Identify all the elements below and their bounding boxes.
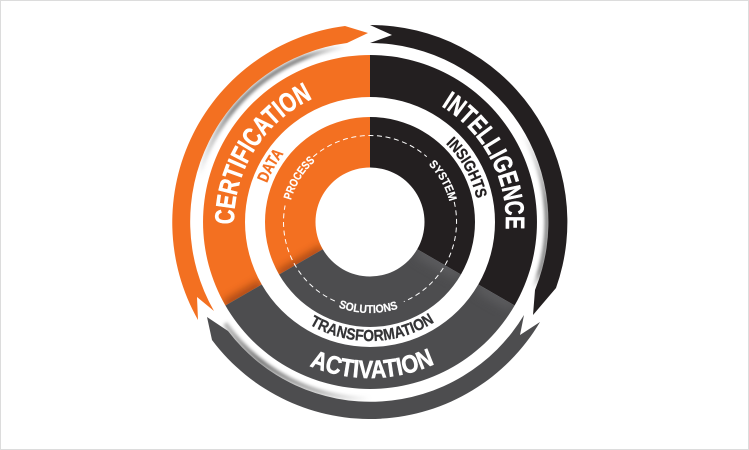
label: process: PROCESS: [283, 156, 314, 200]
segment: activation band: [225, 284, 515, 389]
arrow: certification (orange outer arc): [172, 26, 368, 320]
label: data: DATA: [256, 150, 284, 183]
label: intelligence: INTELLIGENCE: [442, 91, 525, 229]
segment shading near boundaries: [225, 249, 515, 306]
arrow: activation (gray outer arc): [207, 315, 540, 419]
segment: certification band: [203, 55, 370, 306]
label: activation: ACTIVATION: [310, 348, 434, 378]
segment: insights band: [370, 117, 475, 274]
arrow: intelligence (black outer arc): [370, 25, 567, 315]
label: certification: CERTIFICATION: [214, 82, 312, 224]
segment: data band: [265, 117, 370, 274]
label: insights: INSIGHTS: [446, 136, 487, 198]
label: system: SYSTEM: [430, 160, 457, 201]
soft shadows under outer arrows: [199, 47, 547, 399]
label: transformation: TRANSFORMATION: [312, 313, 434, 342]
ring: inner band: [265, 117, 475, 327]
ring: outer band: [203, 55, 537, 389]
label: solutions: SOLUTIONS: [339, 300, 398, 314]
segment: intelligence band: [370, 55, 537, 306]
segment: solutions band: [279, 249, 461, 327]
dashed circle: [284, 136, 457, 302]
